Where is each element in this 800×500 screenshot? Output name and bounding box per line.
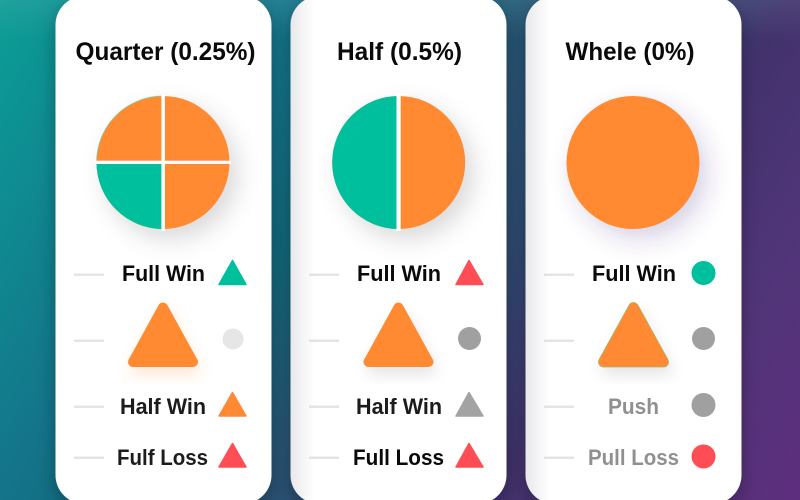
row: large triangle: [74, 308, 244, 362]
row: half win: [74, 392, 246, 419]
title: quarter: Quarter (0.25%): [76, 38, 256, 66]
panel: whole: [526, 0, 742, 500]
row: full loss: [309, 444, 483, 470]
pie chart: quarter: [95, 94, 231, 231]
row: half win: [309, 392, 483, 419]
row: full win: Full Win: [357, 261, 441, 286]
title: whole: Whele (0%): [566, 38, 694, 66]
row: half win: Half Win: [356, 394, 442, 419]
panel: half: [290, 0, 506, 500]
row: push: [544, 393, 716, 419]
pie chart: half: [332, 94, 465, 231]
row: full win: Full Win: [122, 261, 205, 286]
row: fulf loss: Fulf Loss: [117, 445, 208, 470]
row: full win: [544, 261, 716, 286]
row: large triangle: [544, 308, 715, 362]
row: push: Push: [608, 394, 659, 419]
row: pull loss: Pull Loss: [588, 445, 679, 470]
row: full win: Full Win: [592, 261, 676, 286]
row: full loss: Full Loss: [353, 445, 444, 470]
panel: quarter: [56, 0, 272, 500]
row: full win: [309, 260, 483, 286]
row: fulf loss: [74, 444, 246, 470]
title: half: Half (0.5%): [337, 38, 462, 66]
row: pull loss: [544, 444, 716, 470]
pie chart: whole: [566, 96, 700, 229]
row: half win: Half Win: [120, 394, 206, 419]
row: large triangle: [309, 308, 481, 362]
row: full win: [74, 260, 246, 286]
